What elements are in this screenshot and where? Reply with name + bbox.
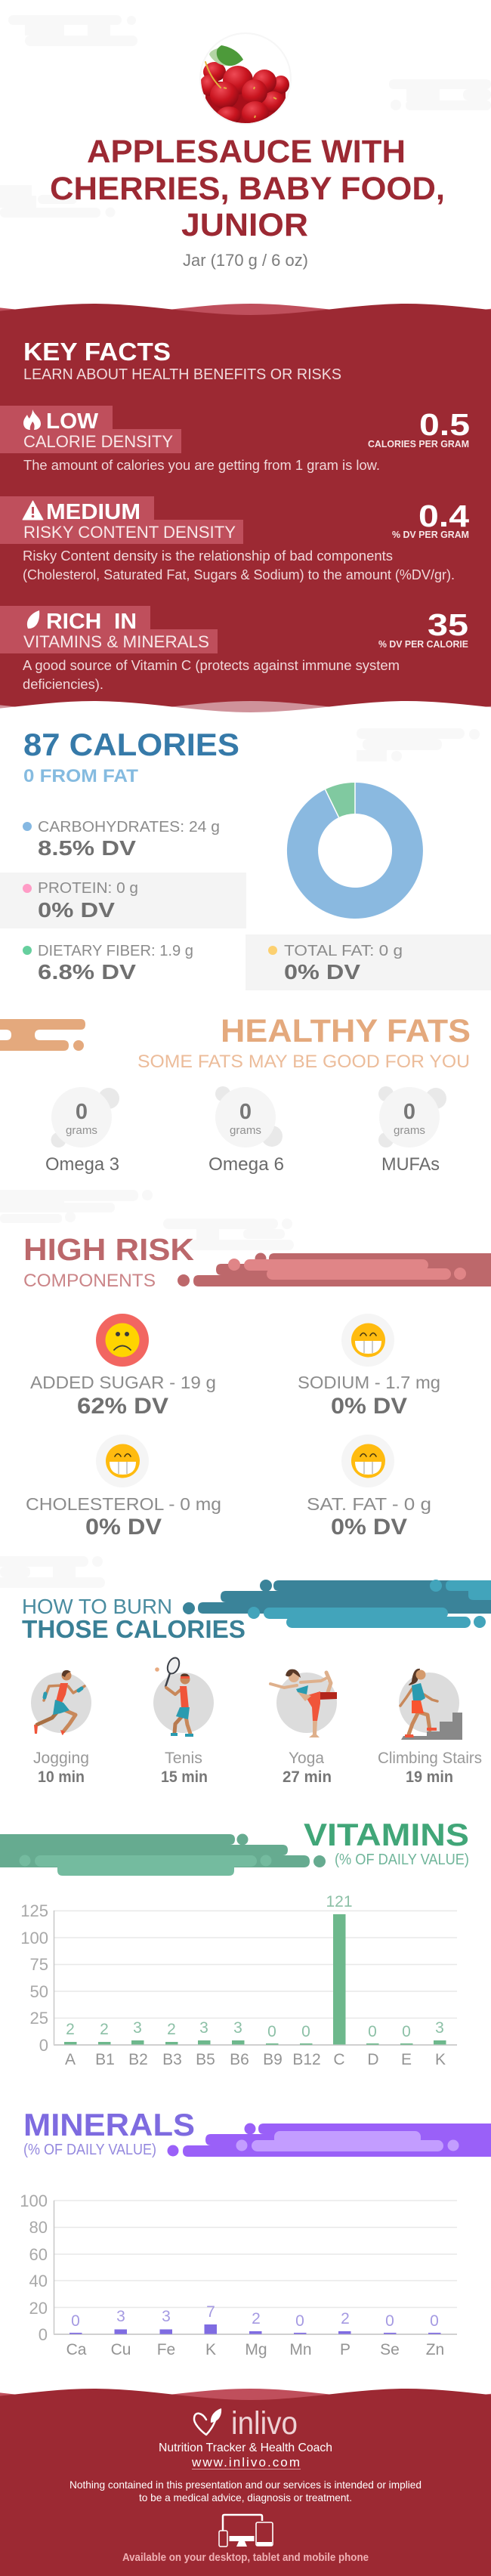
panel: calories bbox=[0, 727, 491, 990]
bar chart: vitamins: 3 bbox=[435, 2019, 444, 2037]
disclaimer: to be a medical advice, diagnosis or treatment. bbox=[139, 2491, 352, 2503]
stat: mufas: grams bbox=[394, 1124, 425, 1137]
risk: cholesterol bbox=[26, 1435, 221, 1540]
logo: inlivo bbox=[194, 2405, 298, 2442]
legend: dietary fiber bbox=[23, 943, 193, 984]
bar chart: vitamins: 2 bbox=[66, 2021, 75, 2038]
fact: calorie density: CALORIES PER GRAM bbox=[368, 438, 469, 449]
decorative cloud: top left bbox=[8, 15, 137, 46]
icon: warning triangle bbox=[23, 501, 43, 520]
panel: high risk bbox=[23, 1232, 491, 1540]
bar chart: vitamins: 0 bbox=[368, 2023, 377, 2040]
activity: climbing stairs: Climbing Stairs bbox=[378, 1750, 482, 1767]
bar chart: vitamins: B3 bbox=[162, 2051, 182, 2068]
stat: omega 6: grams bbox=[230, 1124, 261, 1137]
decorative cloud: calories bbox=[357, 728, 480, 761]
bar chart: vitamins: 50 bbox=[30, 1982, 48, 2001]
heading: HIGH RISK bbox=[23, 1232, 194, 1267]
subheading: 0 FROM FAT bbox=[23, 766, 138, 786]
subheading: SOME FATS MAY BE GOOD FOR YOU bbox=[137, 1052, 470, 1072]
legend: carbohydrates: 8.5% DV bbox=[38, 836, 136, 860]
bar chart: minerals: 3 bbox=[162, 2308, 171, 2325]
stat: omega 3: 0 bbox=[76, 1100, 88, 1124]
bar chart: vitamins: B12 bbox=[292, 2051, 321, 2068]
icon: grin face bbox=[106, 1444, 140, 1478]
legend: protein: 0% DV bbox=[38, 898, 115, 922]
fact: risky content density: RISKY CONTENT DENSITY bbox=[23, 523, 236, 542]
heading: KEY FACTS bbox=[23, 338, 171, 366]
bar chart: minerals: 60 bbox=[29, 2245, 48, 2264]
food image: cherries bbox=[199, 32, 292, 125]
bar chart: vitamins: 125 bbox=[20, 1901, 48, 1920]
fact: risky content density: 0.4 bbox=[418, 499, 469, 533]
bar chart: minerals: P bbox=[340, 2341, 350, 2358]
heading: HEALTHY FATS bbox=[221, 1013, 471, 1049]
bar chart: minerals: Zn bbox=[426, 2341, 444, 2358]
bar chart: minerals: 0 bbox=[71, 2312, 80, 2330]
legend: protein: PROTEIN: 0 g bbox=[38, 880, 138, 897]
icon: grin face bbox=[351, 1444, 385, 1478]
risk: cholesterol: 0% DV bbox=[85, 1515, 162, 1540]
heading: HOW TO BURN bbox=[22, 1595, 172, 1618]
legend: total fat: TOTAL FAT: 0 g bbox=[284, 943, 403, 959]
stat: mufas bbox=[378, 1086, 446, 1175]
panel: footer bbox=[0, 2389, 491, 2576]
disclaimer: Nothing contained in this presentation and our services is intended or implied bbox=[69, 2479, 422, 2491]
fact: vitamins and minerals bbox=[0, 606, 468, 692]
stat: omega 6 bbox=[208, 1086, 284, 1175]
activity: climbing stairs: 19 min bbox=[406, 1768, 453, 1786]
bar chart: minerals: 80 bbox=[29, 2218, 48, 2237]
stat: omega 3 bbox=[45, 1087, 119, 1175]
bar chart: vitamins: 3 bbox=[133, 2019, 142, 2037]
risk: saturated fat: 0% DV bbox=[331, 1515, 407, 1540]
fact: calorie density: LOW bbox=[46, 409, 99, 434]
banner shape: teal bbox=[183, 1580, 491, 1628]
decorative cloud: center bbox=[163, 1219, 294, 1250]
bar chart: vitamins bbox=[20, 1893, 457, 2068]
risk: added sugar bbox=[30, 1314, 216, 1419]
fact: vitamins and minerals: A good source of Vitamin C (protects against immune system bbox=[23, 658, 400, 673]
bar chart: minerals: Mg bbox=[245, 2341, 267, 2358]
fact: calorie density: 0.5 bbox=[419, 407, 470, 442]
icon: sad face bbox=[106, 1324, 139, 1357]
icon: devices bbox=[219, 2515, 273, 2547]
disclaimer bbox=[69, 2479, 422, 2503]
activity: climbing stairs bbox=[378, 1669, 482, 1786]
row: total fat background bbox=[246, 934, 491, 990]
bar chart: vitamins: 0 bbox=[301, 2023, 310, 2040]
subheading: (% OF DAILY VALUE) bbox=[23, 2142, 156, 2158]
risk: added sugar: 62% DV bbox=[77, 1394, 168, 1419]
fact: risky content density: MEDIUM bbox=[46, 500, 141, 524]
risk: saturated fat bbox=[307, 1435, 431, 1540]
row: protein background bbox=[0, 873, 246, 928]
bar chart: minerals: 2 bbox=[252, 2310, 261, 2327]
bar chart: minerals: 100 bbox=[20, 2191, 48, 2210]
activity: jogging: 10 min bbox=[38, 1768, 85, 1786]
fact: vitamins and minerals: % DV PER CALORIE bbox=[378, 638, 468, 650]
activity: tennis: Tenis bbox=[165, 1750, 202, 1767]
bar chart: minerals: 40 bbox=[29, 2272, 48, 2290]
heading: VITAMINS bbox=[304, 1817, 469, 1852]
risk: saturated fat: SAT. FAT - 0 g bbox=[307, 1494, 431, 1514]
risk: cholesterol: CHOLESTEROL - 0 mg bbox=[26, 1494, 221, 1514]
fact: risky content density: % DV PER GRAM bbox=[392, 529, 469, 540]
panel: vitamins bbox=[0, 1817, 469, 2068]
banner shape: red bbox=[178, 1252, 491, 1286]
bar chart: vitamins: B5 bbox=[196, 2051, 215, 2068]
bar chart: minerals: Fe bbox=[157, 2341, 175, 2358]
title: APPLESAUCE WITH bbox=[87, 134, 406, 170]
bar chart: vitamins: D bbox=[367, 2051, 379, 2068]
subheading: (% OF DAILY VALUE) bbox=[335, 1852, 469, 1868]
bar chart: vitamins: 3 bbox=[199, 2019, 208, 2037]
decorative cloud: mid left bbox=[0, 185, 115, 218]
decorative cloud: top right bbox=[389, 79, 491, 110]
decorative cloud: burn bbox=[0, 1556, 105, 1588]
icon: yoga pose bbox=[270, 1669, 337, 1737]
icon: grin face bbox=[351, 1324, 385, 1357]
bar chart: vitamins: A bbox=[65, 2051, 76, 2068]
icon: woman climbing stairs bbox=[400, 1669, 462, 1740]
activity: yoga: Yoga bbox=[289, 1750, 324, 1767]
donut chart bbox=[287, 783, 423, 919]
legend: dietary fiber: DIETARY FIBER: 1.9 g bbox=[38, 943, 193, 959]
tagline: Nutrition Tracker & Health Coach bbox=[159, 2442, 332, 2454]
panel: how to burn bbox=[22, 1580, 491, 1786]
icon: tennis player bbox=[155, 1656, 193, 1737]
bar chart: minerals: Cu bbox=[111, 2341, 131, 2358]
bar chart: vitamins: B1 bbox=[95, 2051, 115, 2068]
bar chart: minerals: 7 bbox=[206, 2303, 215, 2321]
legend: dietary fiber: 6.8% DV bbox=[38, 960, 136, 984]
subheading: COMPONENTS bbox=[23, 1271, 156, 1291]
legend: carbohydrates: CARBOHYDRATES: 24 g bbox=[38, 819, 220, 836]
risk: sodium: SODIUM - 1.7 mg bbox=[298, 1373, 440, 1392]
risk: added sugar: ADDED SUGAR - 19 g bbox=[30, 1373, 216, 1392]
bar chart: vitamins: 25 bbox=[30, 2009, 48, 2028]
fact: risky content density: (Cholesterol, Saturated Fat, Sugars & Sodium) to the amount (%DV/gr). bbox=[23, 567, 455, 582]
subheading: LEARN ABOUT HEALTH BENEFITS OR RISKS bbox=[23, 366, 341, 383]
fact: calorie density bbox=[0, 406, 470, 473]
stat: mufas: 0 bbox=[403, 1100, 415, 1124]
fact: vitamins and minerals: VITAMINS & MINERALS bbox=[23, 632, 209, 651]
bar chart: minerals bbox=[20, 2191, 457, 2358]
bar chart: vitamins: 100 bbox=[20, 1929, 48, 1947]
risk: sodium bbox=[298, 1314, 440, 1419]
banner shape: orange bbox=[0, 1019, 85, 1051]
fact: vitamins and minerals: 35 bbox=[428, 607, 468, 642]
stat: mufas: MUFAs bbox=[381, 1154, 440, 1175]
bar chart: minerals: 0 bbox=[295, 2312, 304, 2330]
bar chart: minerals: K bbox=[205, 2341, 216, 2358]
bar chart: minerals: Ca bbox=[66, 2341, 87, 2358]
bar chart: minerals: 3 bbox=[116, 2308, 125, 2325]
fact: calorie density: The amount of calories you are getting from 1 gram is low. bbox=[23, 458, 380, 473]
website: www.inlivo.com bbox=[191, 2455, 300, 2469]
heading: 87 CALORIES bbox=[23, 727, 239, 762]
serving size: Jar (170 g / 6 oz) bbox=[183, 251, 308, 270]
stat: omega 3: Omega 3 bbox=[45, 1154, 119, 1175]
bar chart: vitamins: K bbox=[435, 2051, 446, 2068]
bar chart: minerals: Se bbox=[380, 2341, 400, 2358]
bar chart: minerals: 0 bbox=[430, 2312, 439, 2330]
banner shape: green bbox=[0, 1834, 326, 1876]
decorative cloud: left bbox=[0, 1190, 153, 1223]
bar chart: minerals: Mn bbox=[289, 2341, 312, 2358]
stat: omega 3: grams bbox=[66, 1124, 97, 1137]
title bbox=[50, 134, 445, 243]
bar chart: vitamins: 0 bbox=[39, 2036, 48, 2055]
banner shape: purple bbox=[168, 2123, 491, 2157]
activity: jogging bbox=[31, 1670, 91, 1786]
logo: inlivo: inlivo bbox=[231, 2405, 298, 2442]
bar chart: minerals: 2 bbox=[341, 2310, 350, 2327]
activity: jogging: Jogging bbox=[33, 1750, 89, 1767]
stat: omega 6: 0 bbox=[239, 1100, 252, 1124]
panel: how to burn: THOSE CALORIES bbox=[22, 1615, 246, 1643]
title: CHERRIES, BABY FOOD, bbox=[50, 171, 445, 207]
bar chart: vitamins: 0 bbox=[267, 2023, 276, 2040]
bar chart: vitamins: 2 bbox=[100, 2021, 109, 2038]
bar chart: vitamins: 2 bbox=[167, 2021, 176, 2038]
heading: MINERALS bbox=[23, 2107, 195, 2142]
fact: vitamins and minerals: RICH IN bbox=[46, 610, 137, 634]
icon: leaf bbox=[27, 610, 39, 629]
bar chart: minerals: 0 bbox=[39, 2325, 48, 2344]
stat: omega 6: Omega 6 bbox=[208, 1154, 284, 1175]
bar chart: vitamins: C bbox=[333, 2051, 345, 2068]
bar chart: vitamins: B6 bbox=[230, 2051, 249, 2068]
availability note: Available on your desktop, tablet and mobile phone bbox=[122, 2551, 369, 2564]
risk: sodium: 0% DV bbox=[331, 1394, 407, 1419]
activity: tennis bbox=[153, 1656, 214, 1786]
panel: healthy fats bbox=[0, 1013, 471, 1175]
bar chart: minerals: 0 bbox=[385, 2312, 394, 2330]
activity: yoga: 27 min bbox=[283, 1768, 332, 1786]
legend: carbohydrates bbox=[23, 819, 220, 860]
title: JUNIOR bbox=[181, 207, 308, 243]
fact: vitamins and minerals: deficiencies). bbox=[23, 677, 103, 692]
bar chart: minerals: 20 bbox=[29, 2299, 48, 2318]
fact: risky content density: Risky Content density is the relationship of bad components bbox=[23, 548, 393, 564]
icon: flame bbox=[23, 409, 41, 430]
bar chart: vitamins: B2 bbox=[128, 2051, 148, 2068]
icon: runner bbox=[34, 1670, 85, 1735]
bar chart: vitamins: E bbox=[401, 2051, 412, 2068]
legend: total fat bbox=[268, 943, 403, 984]
bar chart: vitamins: 0 bbox=[402, 2023, 411, 2040]
bar chart: vitamins: 121 bbox=[326, 1893, 353, 1910]
bar chart: vitamins: 3 bbox=[233, 2019, 242, 2037]
fact: calorie density: CALORIE DENSITY bbox=[23, 432, 173, 451]
bar chart: vitamins: B9 bbox=[263, 2051, 283, 2068]
legend: total fat: 0% DV bbox=[284, 960, 360, 984]
fact: risky content density bbox=[0, 496, 469, 582]
activity: tennis: 15 min bbox=[161, 1768, 208, 1786]
legend: protein bbox=[23, 880, 138, 922]
bar chart: vitamins: 75 bbox=[30, 1955, 48, 1974]
activity: yoga bbox=[270, 1669, 337, 1786]
panel: minerals bbox=[20, 2107, 491, 2358]
panel: key facts bbox=[0, 304, 491, 725]
